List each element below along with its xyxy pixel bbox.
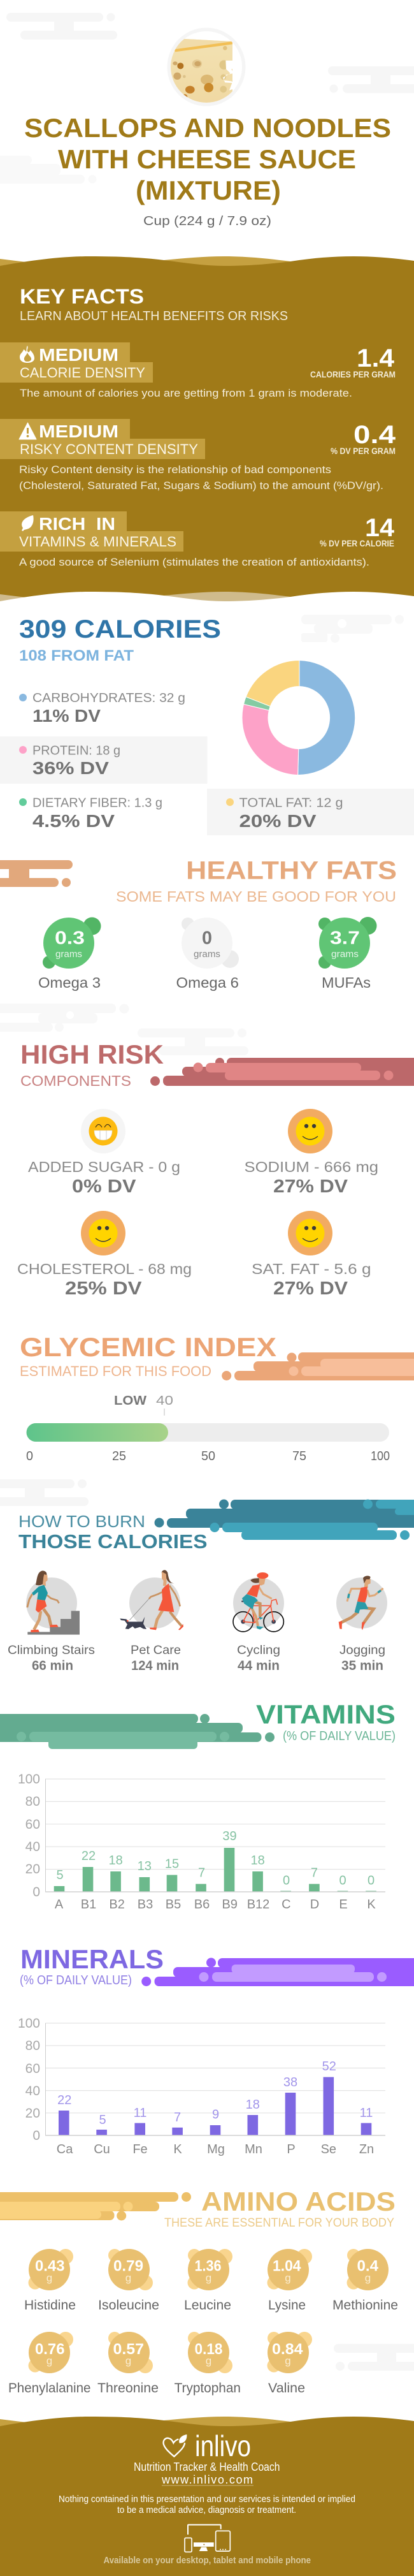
amino: histidine: Histidine [24, 2298, 76, 2313]
amino: histidine: g [46, 2272, 52, 2284]
amino: threonine [97, 2332, 159, 2396]
risk item: saturated fat [252, 1211, 371, 1299]
bar chart: vitamins: 18 [250, 1854, 265, 1868]
bar chart: vitamins: 0 [339, 1873, 346, 1887]
bar chart: vitamins: B5 [166, 1898, 181, 1912]
bar chart: vitamins: 39 [222, 1829, 237, 1843]
gauge: glycemic value: LOW [114, 1394, 146, 1408]
amino: valine: Valine [268, 2381, 305, 2396]
amino: valine: g [285, 2355, 291, 2367]
fact: calorie density: MEDIUM [39, 345, 118, 365]
bar chart: minerals: 60 [25, 2061, 40, 2076]
risk item: sodium [245, 1109, 378, 1197]
donut chart [242, 661, 355, 775]
disclaimer: to be a medical advice, diagnosis or treatment. [117, 2505, 296, 2515]
icon: grinning face [89, 1117, 117, 1145]
availability note: Available on your desktop, tablet and mobile phone [103, 2555, 311, 2566]
decorative banner [154, 1500, 414, 1540]
icon: smiling face [296, 1219, 325, 1247]
bar chart: vitamins: C [282, 1898, 291, 1912]
stat: omega 6: grams [194, 949, 220, 960]
amino: tryptophan [175, 2332, 241, 2396]
activity: jogging: Jogging [339, 1644, 385, 1657]
activity: climbing stairs [8, 1570, 95, 1673]
panel: header [0, 13, 414, 228]
bar chart: minerals: Mn [245, 2142, 262, 2156]
icon: woman climbing stairs [26, 1570, 80, 1635]
bar chart: vitamins [18, 1772, 385, 1912]
fact: rich in vitamins and minerals: VITAMINS & MINERALS [19, 534, 176, 550]
heading: key facts: KEY FACTS [20, 285, 144, 308]
disclaimer: Nothing contained in this presentation and our services is intended or implied [59, 2494, 355, 2505]
bar chart: vitamins: 5 [56, 1868, 64, 1882]
bar chart: vitamins: B2 [109, 1898, 125, 1912]
activity: climbing stairs: Climbing Stairs [8, 1644, 95, 1657]
bar chart: vitamins: 80 [25, 1794, 40, 1809]
amino: threonine: 0.57 [113, 2341, 144, 2358]
risk item: sodium: SODIUM - 666 mg [245, 1159, 378, 1175]
amino: isoleucine [98, 2249, 159, 2313]
amino: threonine: Threonine [97, 2381, 159, 2396]
panel: glycemic index [20, 1332, 414, 1463]
bar chart: vitamins: B1 [81, 1898, 96, 1912]
heading: amino acids: AMINO ACIDS [201, 2186, 396, 2216]
gauge: glycemic value: 40 [156, 1394, 173, 1408]
activity: cycling: 44 min [238, 1658, 280, 1673]
bar chart: minerals: 11 [134, 2106, 146, 2120]
decorative banner [0, 1714, 275, 1749]
icon: flame [20, 346, 34, 363]
amino: methionine: g [365, 2272, 371, 2284]
legend: carbohydrates [19, 691, 185, 726]
bar chart: minerals: K [173, 2142, 182, 2156]
bar chart: vitamins: B3 [138, 1898, 153, 1912]
legend: protein: PROTEIN: 18 g [32, 743, 120, 757]
activity: pet care: 124 min [131, 1658, 179, 1673]
icon: smiling face [296, 1117, 325, 1145]
legend: total fat: 20% DV [239, 811, 317, 831]
fact: risky content density: RISKY CONTENT DENSITY [20, 441, 198, 457]
stat: omega 3: 0.3 [55, 928, 85, 949]
gauge: glycemic value: 100 [371, 1449, 390, 1463]
heading: those calories: THOSE CALORIES [18, 1530, 208, 1553]
panel: amino acids [0, 2186, 414, 2396]
amino: tryptophan: Tryptophan [175, 2381, 241, 2396]
legend: total fat [207, 789, 414, 835]
amino: leucine [184, 2249, 231, 2313]
decorative banner [222, 1352, 414, 1380]
fact: calorie density: CALORIES PER GRAM [310, 369, 396, 379]
decorative banner [150, 1058, 414, 1086]
bar chart: minerals: Mg [207, 2142, 225, 2156]
legend: total fat: TOTAL FAT: 12 g [239, 796, 343, 810]
bar chart: minerals: 11 [360, 2106, 373, 2120]
bar chart: vitamins: 0 [368, 1873, 375, 1887]
stat: mufas: MUFAs [322, 974, 371, 991]
fact: risky content density: % DV PER GRAM [331, 446, 396, 456]
bar chart: minerals: 0 [32, 2128, 40, 2143]
legend: protein [0, 736, 208, 784]
amino: threonine: g [125, 2355, 131, 2367]
bar chart: minerals: 100 [18, 2016, 40, 2031]
risk item: cholesterol [17, 1211, 192, 1299]
amino: methionine [332, 2249, 398, 2313]
amino: phenylalanine: Phenylalanine [8, 2381, 90, 2396]
bar chart: vitamins: 7 [198, 1866, 205, 1880]
decorative banner [0, 2192, 191, 2220]
bar chart: vitamins: 15 [165, 1857, 179, 1871]
decorative banner [0, 860, 73, 887]
website link: www.inlivo.com [161, 2473, 253, 2486]
stat: mufas [318, 917, 377, 991]
stat: omega 3: Omega 3 [38, 974, 101, 991]
icon: cyclist [233, 1572, 284, 1632]
legend: dietary fiber: 4.5% DV [32, 811, 115, 831]
gauge: glycemic value: 0 [26, 1449, 33, 1463]
icon: leaf [22, 515, 34, 531]
risk item: added sugar: ADDED SUGAR - 0 g [28, 1159, 180, 1175]
bar chart: minerals: Zn [359, 2142, 374, 2156]
bar chart: minerals: 7 [174, 2111, 181, 2125]
icon: woman walking dog [120, 1570, 183, 1630]
subheading: components: COMPONENTS [20, 1072, 131, 1089]
bar chart: vitamins: 40 [25, 1840, 40, 1854]
icon: warning triangle [19, 423, 36, 439]
amino: isoleucine: Isoleucine [98, 2298, 159, 2313]
fact: risky content density: (Cholesterol, Saturated Fat, Sugars & Sodium) to the amount (%DV/gr). [19, 479, 383, 492]
bar chart: minerals: 80 [25, 2038, 40, 2053]
subheading: from fat: 108 FROM FAT [19, 647, 134, 664]
amino: histidine [24, 2249, 76, 2313]
bar chart: minerals: 20 [25, 2106, 40, 2121]
bar chart: minerals: Fe [132, 2142, 148, 2156]
gauge: glycemic value: 25 [112, 1449, 126, 1463]
amino: leucine: g [206, 2272, 211, 2284]
fact: rich in vitamins and minerals [0, 511, 395, 568]
bar chart: vitamins: B12 [247, 1898, 269, 1912]
panel: high risk components [17, 1039, 414, 1299]
title: SCALLOPS AND NOODLES [24, 113, 391, 143]
gauge: glycemic value: 75 [292, 1449, 306, 1463]
stat: omega 3: grams [55, 949, 82, 960]
bar chart: minerals: 18 [246, 2098, 260, 2112]
fact: calorie density: CALORIE DENSITY [20, 365, 145, 381]
icon: runner [336, 1576, 387, 1630]
subheading: THESE ARE ESSENTIAL FOR YOUR BODY [164, 2216, 394, 2230]
fact: calorie density [0, 342, 396, 399]
panel: footer [0, 2417, 414, 2576]
amino: isoleucine: g [125, 2272, 131, 2284]
icon: smiling face [89, 1219, 117, 1247]
heading: healthy fats: HEALTHY FATS [186, 857, 397, 885]
activity: pet care: Pet Care [131, 1644, 181, 1657]
risk item: saturated fat: 27% DV [273, 1278, 348, 1299]
stat: omega 6: Omega 6 [176, 974, 239, 991]
stat: mufas: grams [331, 949, 359, 960]
bar chart: minerals: 22 [57, 2093, 71, 2107]
panel: healthy fats [0, 857, 397, 1055]
amino: leucine: Leucine [184, 2298, 231, 2313]
bar chart: minerals: 52 [322, 2060, 336, 2074]
activity: jogging [336, 1576, 387, 1673]
risk item: sodium: 27% DV [273, 1176, 348, 1197]
panel: how to burn those calories [0, 1479, 414, 1673]
icon: cheese [167, 28, 246, 110]
amino: phenylalanine [8, 2332, 90, 2396]
bar chart: minerals: 40 [25, 2084, 40, 2098]
bar chart: minerals: Ca [57, 2142, 73, 2156]
serving size: Cup (224 g / 7.9 oz) [143, 214, 271, 228]
decorative banner [141, 1958, 414, 1986]
legend: carbohydrates: CARBOHYDRATES: 32 g [32, 691, 185, 705]
panel: calories [0, 615, 414, 835]
fact: risky content density [0, 419, 396, 492]
amino: tryptophan: g [206, 2355, 211, 2367]
heading: minerals: MINERALS [20, 1944, 164, 1974]
activity: cycling: Cycling [237, 1644, 280, 1657]
fact: rich in vitamins and minerals: % DV PER CALORIE [320, 538, 394, 548]
bar chart: vitamins: 100 [18, 1772, 40, 1787]
legend: carbohydrates: 11% DV [32, 706, 101, 726]
subheading: (% OF DAILY VALUE) [283, 1729, 396, 1743]
bar chart: vitamins: A [55, 1898, 64, 1912]
amino: lysine: Lysine [268, 2298, 306, 2313]
bar chart: minerals: 5 [99, 2113, 106, 2127]
subheading: SOME FATS MAY BE GOOD FOR YOU [116, 888, 396, 905]
stat: omega 6 [176, 918, 239, 991]
risk item: added sugar [28, 1109, 180, 1197]
title: WITH CHEESE SAUCE [58, 144, 356, 174]
amino: valine: 0.84 [272, 2341, 303, 2358]
bar chart: vitamins: 7 [311, 1866, 318, 1880]
heading: high risk: HIGH RISK [20, 1039, 164, 1069]
bar chart: vitamins: E [339, 1898, 348, 1912]
amino: tryptophan: 0.18 [195, 2341, 223, 2358]
panel: minerals [18, 1944, 414, 2156]
legend: dietary fiber [19, 796, 162, 831]
bar chart: vitamins: K [367, 1898, 376, 1912]
stat: omega 6: 0 [202, 928, 212, 949]
activity: pet care [120, 1570, 183, 1673]
bar chart: vitamins: D [310, 1898, 319, 1912]
fact: rich in vitamins and minerals: RICH IN [39, 514, 115, 534]
bar chart: minerals: Cu [94, 2142, 110, 2156]
legend: dietary fiber: DIETARY FIBER: 1.3 g [32, 796, 162, 810]
panel: vitamins [0, 1699, 396, 1912]
bar chart: vitamins: B6 [194, 1898, 210, 1912]
bar chart: minerals: P [287, 2142, 296, 2156]
subheading: LEARN ABOUT HEALTH BENEFITS OR RISKS [20, 309, 288, 323]
fact: rich in vitamins and minerals: 14 [365, 514, 395, 542]
bar chart: vitamins: 20 [25, 1862, 40, 1877]
icon: devices [185, 2525, 230, 2552]
title [24, 113, 391, 205]
amino: methionine: 0.4 [357, 2258, 379, 2275]
bar chart: minerals: 9 [212, 2108, 219, 2122]
stat: mufas: 3.7 [330, 928, 360, 949]
amino: lysine: g [285, 2272, 291, 2284]
amino: valine [268, 2332, 309, 2396]
amino: lysine [268, 2249, 309, 2313]
logo: heart and leaf [164, 2434, 187, 2457]
subheading: (% OF DAILY VALUE) [20, 1973, 132, 1987]
gauge: glycemic value [26, 1394, 390, 1463]
panel: key facts [0, 256, 414, 617]
disclaimer [59, 2494, 355, 2515]
bar chart: vitamins: 60 [25, 1817, 40, 1832]
activity: cycling [233, 1572, 284, 1673]
bar chart: vitamins: B9 [222, 1898, 238, 1912]
risk item: added sugar: 0% DV [72, 1176, 136, 1197]
risk item: cholesterol: 25% DV [65, 1278, 142, 1299]
amino: isoleucine: 0.79 [113, 2258, 143, 2275]
subheading: ESTIMATED FOR THIS FOOD [20, 1363, 211, 1379]
fact: rich in vitamins and minerals: A good source of Selenium (stimulates the creation of antioxidants). [19, 556, 369, 568]
amino: leucine: 1.36 [195, 2258, 222, 2275]
heading: vitamins: VITAMINS [256, 1699, 396, 1729]
amino: phenylalanine: g [46, 2355, 52, 2367]
heading: calories: 309 CALORIES [19, 615, 221, 643]
bar chart: minerals: Se [321, 2142, 336, 2156]
amino: lysine: 1.04 [273, 2258, 301, 2275]
bar chart: minerals [18, 2016, 385, 2156]
amino: methionine: Methionine [332, 2298, 398, 2313]
risk item: saturated fat: SAT. FAT - 5.6 g [252, 1261, 371, 1277]
bar chart: minerals: 38 [283, 2075, 297, 2089]
gauge: glycemic value: 50 [201, 1449, 215, 1463]
fact: calorie density: 1.4 [357, 344, 395, 372]
bar chart: vitamins: 22 [82, 1849, 96, 1863]
amino: histidine: 0.43 [35, 2258, 65, 2275]
activity: climbing stairs: 66 min [32, 1658, 73, 1673]
bar chart: vitamins: 13 [138, 1859, 152, 1873]
fact: calorie density: The amount of calories you are getting from 1 gram is moderate. [20, 387, 352, 399]
fact: risky content density: MEDIUM [39, 421, 118, 441]
heading: how to burn: HOW TO BURN [18, 1512, 145, 1531]
legend: protein: 36% DV [32, 758, 109, 778]
fact: risky content density: Risky Content density is the relationship of bad components [19, 464, 331, 476]
tagline: Nutrition Tracker & Health Coach [134, 2461, 280, 2473]
logo wordmark: inlivo [195, 2429, 251, 2463]
stat: omega 3 [38, 917, 101, 991]
amino: phenylalanine: 0.76 [35, 2341, 65, 2358]
fact: risky content density: 0.4 [353, 421, 396, 449]
bar chart: vitamins: 0 [32, 1885, 40, 1899]
activity: jogging: 35 min [341, 1658, 383, 1673]
bar chart: vitamins: 18 [108, 1854, 123, 1868]
heading: glycemic index: GLYCEMIC INDEX [20, 1332, 276, 1362]
risk item: cholesterol: CHOLESTEROL - 68 mg [17, 1261, 192, 1277]
title: (MIXTURE) [136, 175, 281, 205]
bar chart: vitamins: 0 [283, 1873, 290, 1887]
